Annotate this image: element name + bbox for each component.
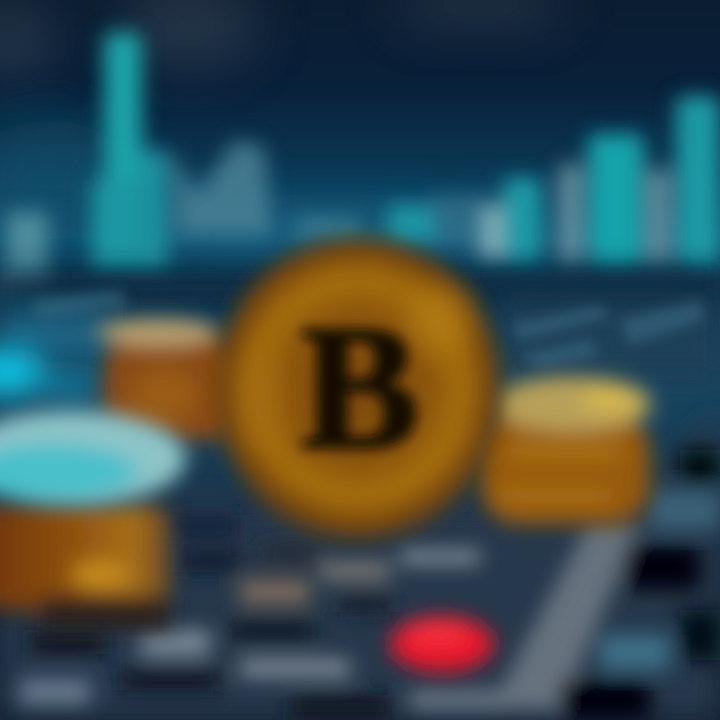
chart bars right (295, 96, 720, 266)
coin stack: right (480, 376, 652, 524)
coin stack: front left with cyan top (0, 410, 186, 630)
reflective floor streaks (30, 290, 705, 368)
storm clouds at the top (0, 0, 570, 80)
cyan glow at left (0, 348, 105, 399)
keyboard keys (20, 450, 720, 720)
main bitcoin coin (215, 238, 501, 538)
chart bars left (6, 32, 272, 288)
bitcoin symbol: B (301, 288, 419, 486)
red button (390, 616, 494, 672)
keyboard surface (0, 410, 720, 720)
dark band below the chart (0, 272, 720, 380)
coin stack: back left (96, 318, 239, 440)
horizon glow (0, 120, 560, 259)
